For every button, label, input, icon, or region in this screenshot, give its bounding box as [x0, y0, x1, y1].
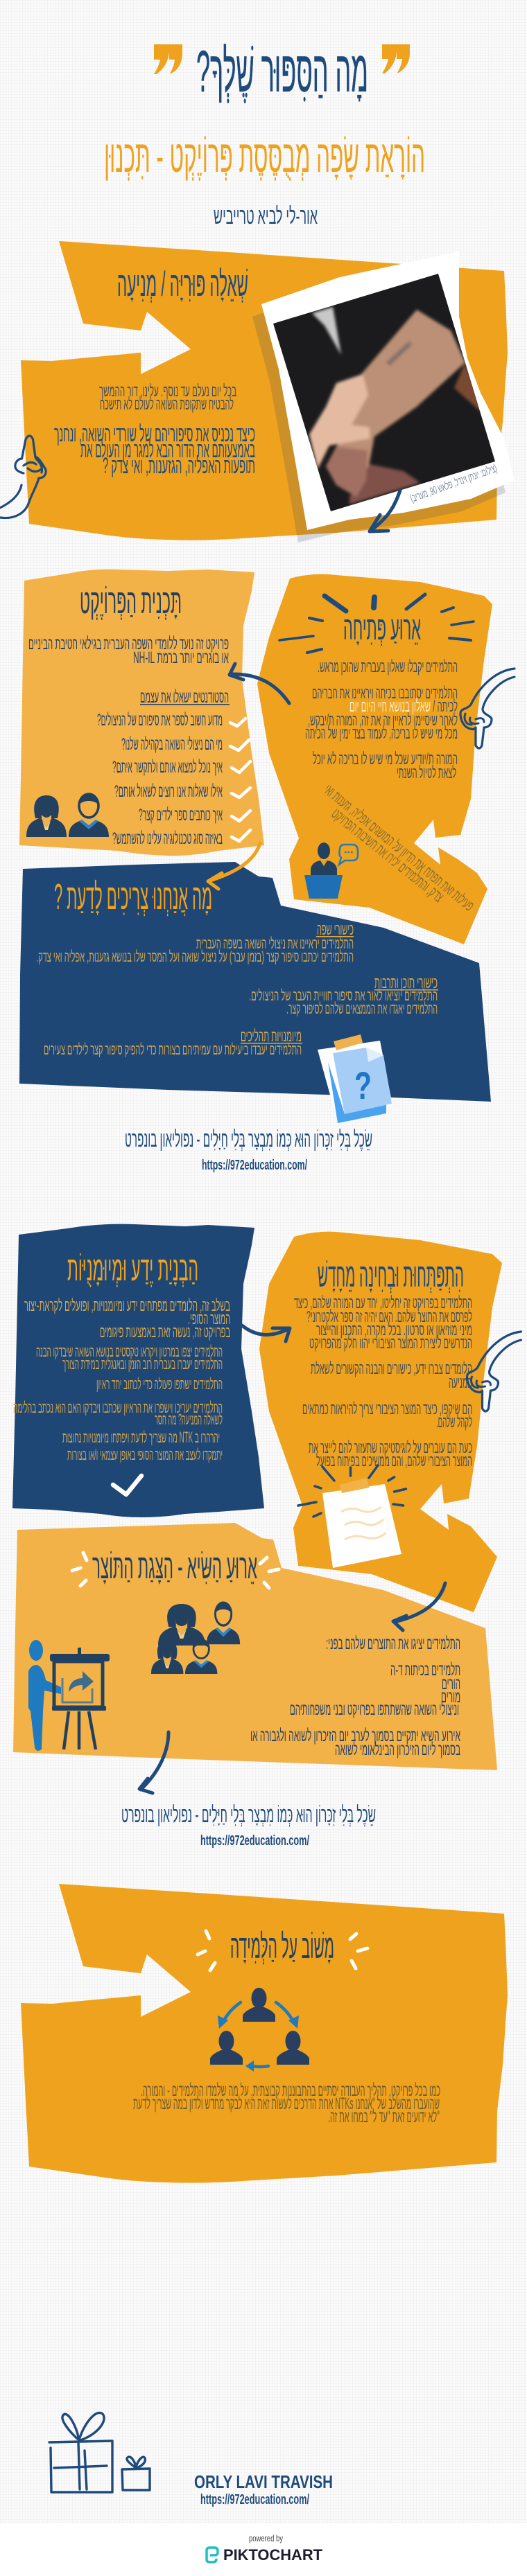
panel: feedback on learning [21, 1884, 508, 2183]
icon: left quote mark [154, 44, 182, 74]
panel: knowledge and skills: התלמידים יעריכו וישפרו את הראיון שכתבו ויבדקו האם הוא נכתב בהלימה [13, 1399, 223, 1416]
panel: feedback on learning: מָשׁוֹב עַל הַלְּמִידָה [230, 1929, 334, 1966]
arrow: project plan to knowledge panel [208, 843, 260, 889]
content and culture skills [249, 973, 438, 1017]
icon: feedback cycle [210, 1988, 309, 2072]
icon: clipboard question: ? [354, 1064, 372, 1107]
footer: powered by Piktochart [207, 2533, 323, 2564]
panel shape [19, 862, 491, 1102]
paragraph: scaffolds [13, 1343, 223, 1463]
icon: speaker at podium [304, 843, 358, 899]
panel: what we need to know: כישורי שפה [317, 920, 354, 938]
panel: driving question: שְׁאֵלָה פּוּרִיָּה / מְנִיעָה [117, 265, 248, 303]
panel: driving question: באמצעותם את הדור הבא למגר מן העולם את [80, 437, 255, 462]
panel: driving question [21, 241, 515, 542]
panel: project plan: הסטודנטים ישאלו את עצמם [140, 688, 229, 707]
panel shape [21, 241, 508, 540]
link: https://972education.com/ [200, 1833, 309, 1849]
panel: what we need to know: מָה אֲנַחְנוּ צְרִיכִים לָדַעַת ? [54, 877, 212, 917]
driving question text [54, 421, 255, 478]
panel: project plan: איך כותבים ספר ילדים קצר? [139, 806, 223, 824]
panel shape [12, 1224, 264, 1517]
panel: project plan: מדוע חשוב לספר את סיפורם של הניצולים? [97, 711, 223, 730]
opening event text: לכיתה / שאלון בנושא חיי היום יום [349, 697, 458, 715]
panel: project plan: תָּכְנִית הַפְּרוֹיֶקְט [80, 582, 182, 621]
Piktochart wordmark: PIKTOCHART [223, 2546, 323, 2564]
powered by text: powered by [249, 2533, 283, 2543]
panel: knowledge and skills: המוצר הסופי. [188, 1309, 230, 1327]
panel: culminating event: מורים [441, 1688, 460, 1706]
opening event text [305, 658, 458, 782]
link: https://972education.com/ [200, 2492, 309, 2507]
panel: opening event: לצאת לטיול השנתי [397, 764, 456, 782]
panel: project plan: מי הם ניצולי השואה בקהילה שלנו? [121, 735, 223, 754]
panel: knowledge and skills: התלמידים יצפו במרטון ויקראו טקסטים בנושא השואה שיבדקו הבנה [36, 1343, 223, 1360]
questions subheading [140, 688, 230, 707]
author: אור-לי לביא טרייביש [214, 203, 318, 229]
photo: polaroid [252, 252, 515, 542]
panel: project plan: אילו שאלות אנו רוצים לשאול אותם? [114, 782, 223, 801]
panel: project plan: באיזה סוג טכנולוגיה עלינו להשתמש? [112, 829, 223, 848]
panel shape [21, 1884, 508, 2183]
panel: culminating event: הורים [442, 1675, 460, 1693]
process skills [44, 1027, 302, 1058]
icon: white dashes [72, 1553, 279, 1588]
arrow: knowledge to development [242, 1325, 290, 1341]
icon: pointing hand right [467, 1332, 521, 1411]
icon: pointing hand left [0, 436, 46, 518]
panel: knowledge and skills [12, 1224, 264, 1517]
icon: students [26, 794, 109, 837]
panel: project plan: פרויקט זה נועד ללומדי השפה העברית בגילאי חטיבת הביניים [28, 635, 229, 653]
icon: audience group [151, 1603, 240, 1674]
intro text: בכל יום נעלם עד נוסף. עלינו, דור ההמשך [99, 382, 236, 400]
audience text [250, 1634, 460, 1759]
icon: white dashes [198, 1931, 368, 1970]
panel: development and review: המניעה [449, 1373, 472, 1391]
icon: presenter and board [28, 1640, 110, 1751]
icon: check mark [113, 1476, 141, 1494]
content and culture skills: כישורי תוכן ותרבות [374, 973, 438, 991]
icon: gifts [49, 2412, 150, 2492]
panel: development and review [259, 1232, 502, 1612]
panel: development and review: לקהל שלהם. [436, 1413, 472, 1431]
panel: driving question: תופעות האפליה, הגזענות, ואי צדק ? [103, 453, 255, 478]
panel: driving question: להבטיח שתקופת השואה לעולם לא תישכח [100, 395, 234, 413]
panel: culminating event [13, 1523, 497, 1770]
check marks [230, 718, 250, 841]
panel: knowledge and skills: לשאלה המניעה? מה חסר [155, 1411, 223, 1428]
panel: opening event [257, 574, 492, 944]
development text [294, 1294, 472, 1470]
arrow: culminating event to quote [139, 1732, 169, 1793]
panel: driving question: כיצד נכניס את סיפוריהם של שורדי השואה, ונחנך [54, 421, 255, 446]
panel: project plan: איך נוכל למצוא אותם ולתקשר איתם? [112, 758, 223, 777]
panel shape [19, 570, 264, 856]
project description: או בוגרים יותר ברמת NH-IL [133, 649, 229, 667]
paragraph: scaffolds: יהרהרו ב NTK מה שצריך לדעת ויפתחו מיומנויות נחוצות [62, 1429, 220, 1446]
panel: project plan [19, 570, 264, 856]
arrow: development to culminating event [393, 1583, 445, 1630]
panel: culminating event: אֵרוּעַ הַשִּׂיא - הַצָּגַת הַתּוֹצָר [92, 1547, 257, 1586]
arrow: opening event to project plan [230, 664, 289, 703]
language skills [36, 920, 354, 965]
icon: sun rays [279, 594, 474, 653]
icon: paper with rays [298, 1465, 406, 1568]
panel shape [257, 574, 492, 944]
icon: Piktochart logo [207, 2548, 218, 2562]
panel: knowledge and skills: התלמידים יעברו בעברית רוב הזמן ובאנגלית במידת הצורך [62, 1355, 223, 1373]
reflection text [133, 2081, 440, 2126]
process skills: מיומנויות תהליכים [241, 1027, 302, 1045]
panel: what we need to know: התלמידים יראיינו את ניצולי השואה בשפה העברית [196, 935, 354, 952]
panel shape [13, 1523, 497, 1770]
panel: knowledge and skills: בפרויקט זה, נעשה זאת באמצעות פיגומים [100, 1323, 230, 1341]
panel: what we need to know [19, 862, 491, 1123]
link: https://972education.com/ [202, 1158, 307, 1173]
author signature: ORLY LAVI TRAVISH [194, 2471, 333, 2492]
icon: right quote mark [382, 44, 410, 73]
checklist [97, 711, 223, 848]
panel: knowledge and skills: התלמידים ישתפו פעולה כדי לכתוב יחד ראיון [96, 1375, 223, 1393]
rotated reflection text [320, 781, 478, 915]
paragraph: building skills [24, 1296, 230, 1341]
panel: knowledge and skills: יתמקדו לעצב את המוצר הסופי באופן עצמאי ו/או בצורות [67, 1446, 223, 1463]
panel: opening event: אֵרוּעַ פְּתִיחָה [343, 610, 421, 647]
panel: knowledge and skills: הַבְנָיַת יֶדַע וּמְיוּמָנֻיּוֹת [67, 1249, 198, 1288]
icon: pointing hand right [460, 669, 515, 748]
intro text [99, 382, 236, 413]
project description [28, 635, 229, 667]
panel shape [259, 1232, 502, 1612]
panel: knowledge and skills: בשלב זה, הלומדים מפתחים ידע ומיומנויות, ופועלים לקראת-יצור [24, 1296, 230, 1314]
header [104, 39, 425, 229]
icon: clipboard question [318, 1034, 392, 1123]
arrow: photo to next section [370, 491, 400, 531]
